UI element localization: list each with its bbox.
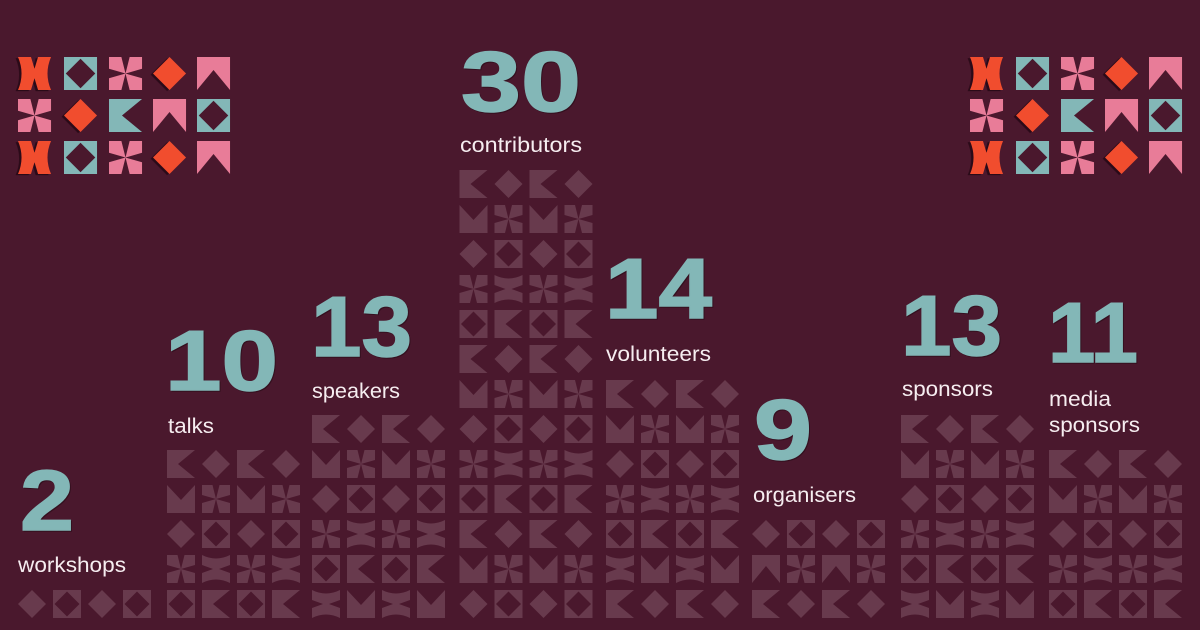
icon: pattern logo left — [18, 57, 230, 174]
stat: volunteers: volunteers — [606, 343, 711, 366]
tile column: contributors — [460, 170, 592, 618]
stat: sponsors: 13 — [901, 279, 1002, 374]
icon: pattern logo right — [970, 57, 1182, 174]
stat: talks: 10 — [165, 314, 278, 409]
stat: volunteers — [605, 242, 712, 366]
stat: talks: talks — [168, 415, 214, 438]
stat: speakers: speakers — [312, 380, 400, 403]
stat: volunteers: 14 — [605, 242, 712, 337]
stat: workshops: 2 — [20, 454, 74, 549]
stat: speakers: 13 — [311, 280, 412, 375]
tile column: volunteers — [606, 380, 739, 618]
stat: talks — [165, 314, 278, 438]
stat: organisers: 9 — [754, 383, 812, 478]
stat: sponsors: sponsors — [902, 378, 993, 401]
tile column: workshops — [18, 590, 151, 618]
tile column: speakers — [312, 415, 445, 618]
tile column: organisers — [752, 520, 885, 618]
stat: media sponsors: sponsors — [1049, 414, 1140, 437]
tile column: sponsors — [901, 415, 1034, 618]
tile column: talks — [167, 450, 300, 618]
stat: organisers — [753, 383, 856, 507]
stat: workshops: workshops — [17, 554, 126, 577]
stat: media sponsors: 11 — [1048, 286, 1138, 381]
stat: workshops — [17, 454, 126, 577]
stat: media sponsors — [1048, 286, 1140, 437]
stat: organisers: organisers — [753, 484, 856, 507]
stat: contributors: contributors — [460, 134, 582, 157]
stat: contributors: 30 — [461, 35, 581, 130]
stat: media sponsors: media — [1049, 388, 1111, 411]
stat: contributors — [460, 35, 582, 157]
tile column: media sponsors — [1049, 450, 1182, 618]
